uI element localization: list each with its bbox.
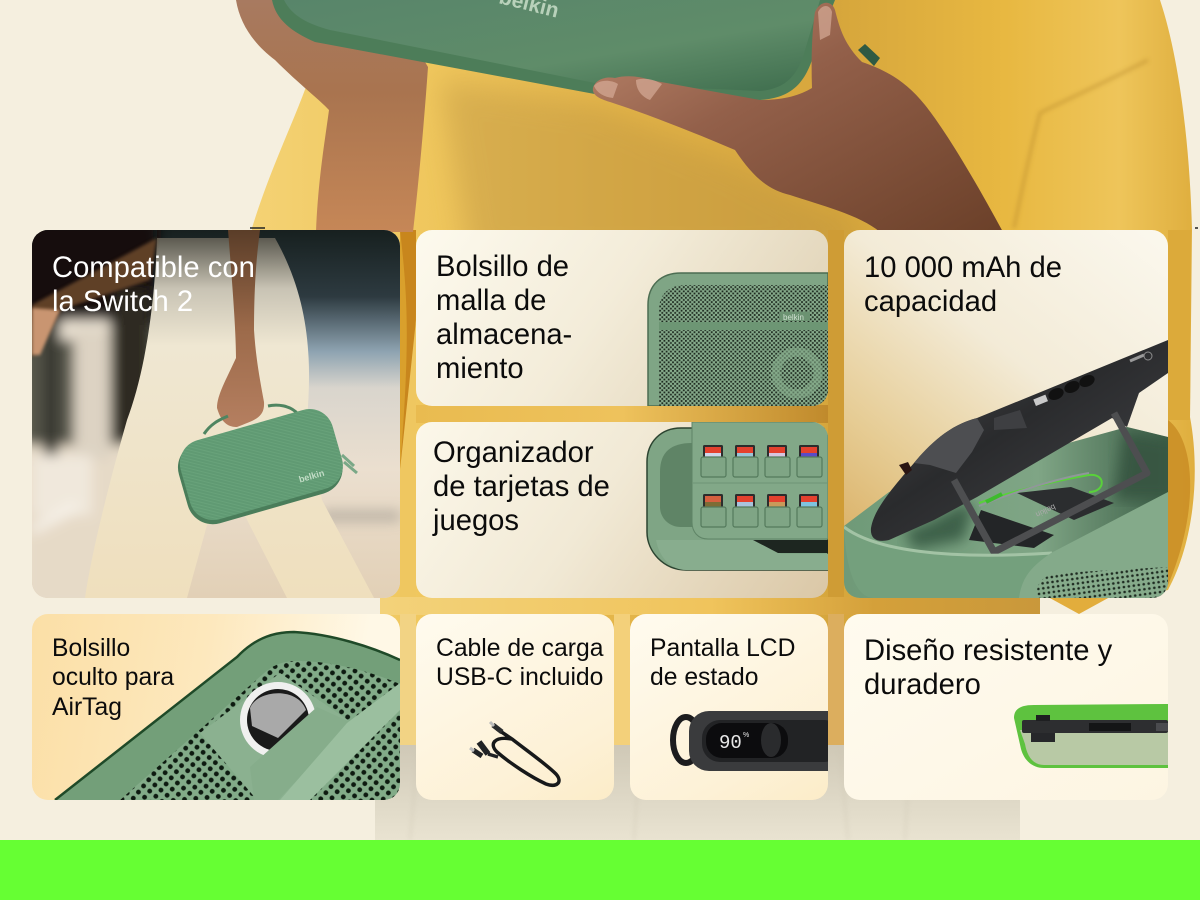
heading bbox=[864, 252, 1062, 318]
panel: diseño resistente bbox=[844, 614, 1168, 800]
heading: la Switch 2 bbox=[52, 286, 193, 318]
green footer band bbox=[0, 840, 1200, 900]
heading: Compatible con bbox=[52, 252, 255, 284]
heading: Bolsillo bbox=[52, 635, 130, 662]
photo: walking person carrying case bbox=[32, 230, 400, 794]
heading: Organizador bbox=[433, 437, 594, 469]
heading: miento bbox=[436, 353, 524, 385]
image: console on stand inside case bbox=[844, 340, 1168, 598]
image: mesh pocket bbox=[647, 272, 828, 406]
heading: de tarjetas de bbox=[433, 471, 610, 503]
heading bbox=[436, 251, 572, 385]
image: game card organizer bbox=[646, 422, 828, 571]
heading: oculto para bbox=[52, 664, 174, 691]
heading: AirTag bbox=[52, 694, 122, 721]
heading: de estado bbox=[650, 664, 758, 691]
image: console on stand inside case: belkin bbox=[1034, 502, 1057, 519]
heading: USB-C incluido bbox=[436, 664, 603, 691]
heading: Diseño resistente y bbox=[864, 635, 1112, 667]
heading bbox=[52, 252, 255, 318]
heading: capacidad bbox=[864, 286, 997, 318]
image: USB-C cable bbox=[469, 721, 561, 788]
heading bbox=[432, 437, 610, 537]
image: LCD battery bbox=[670, 711, 828, 771]
photo: walking person carrying case: belkin bbox=[298, 468, 325, 485]
heading: juegos bbox=[433, 505, 519, 537]
panel: cable USB-C bbox=[416, 614, 614, 800]
image: LCD battery: 90 bbox=[719, 732, 742, 754]
panel: bolsillo de malla bbox=[416, 230, 828, 406]
heading bbox=[52, 635, 174, 721]
panel: bolsillo oculto para AirTag bbox=[32, 614, 400, 800]
image: mesh pocket: belkin bbox=[783, 313, 804, 322]
heading: Bolsillo de bbox=[436, 251, 569, 283]
heading: duradero bbox=[864, 669, 981, 701]
panel: compatible con la Switch 2 bbox=[32, 230, 400, 598]
heading bbox=[650, 635, 795, 691]
panel: organizador de tarjetas bbox=[416, 422, 828, 598]
heading: 10 000 mAh de bbox=[864, 252, 1062, 284]
heading bbox=[436, 635, 604, 691]
heading: malla de bbox=[436, 285, 546, 317]
panel: pantalla LCD bbox=[630, 614, 828, 800]
panel: 10 000 mAh bbox=[844, 230, 1168, 598]
heading: Pantalla LCD bbox=[650, 635, 795, 662]
image: AirTag pocket bbox=[54, 630, 400, 800]
image: LCD battery: % bbox=[743, 732, 749, 739]
heading bbox=[864, 635, 1112, 701]
heading: almacena- bbox=[436, 319, 572, 351]
heading: Cable de carga bbox=[436, 635, 603, 662]
image: console in rugged case bbox=[1014, 704, 1168, 768]
